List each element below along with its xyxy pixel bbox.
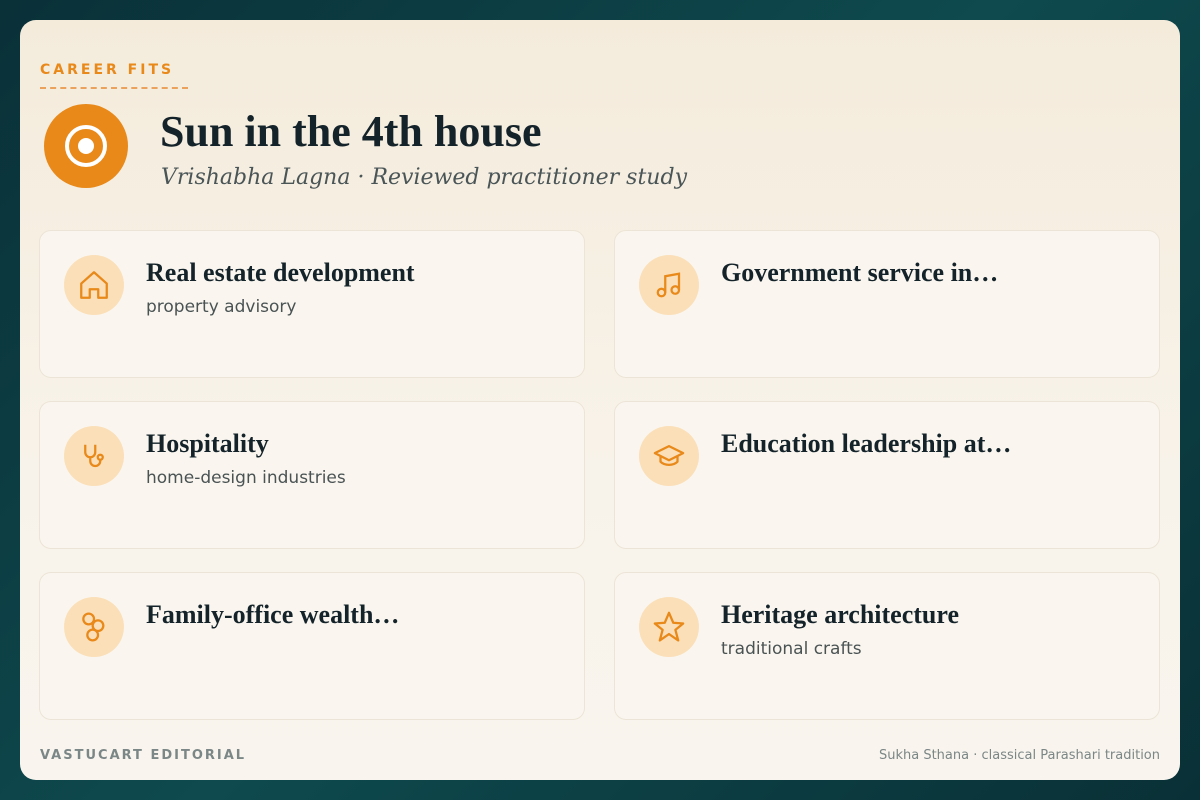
card: real estate: property advisory	[146, 297, 296, 317]
card: government	[614, 230, 1160, 378]
icon: graduation cap	[639, 426, 699, 486]
card: hospitality: home-design industries	[146, 468, 346, 488]
icon: music	[639, 255, 699, 315]
card: family office	[39, 572, 585, 720]
icon: stethoscope	[64, 426, 124, 486]
card: heritage: Heritage architecture	[721, 600, 959, 629]
card: hospitality	[39, 401, 585, 549]
icon: sun	[44, 104, 128, 188]
icon: house	[64, 255, 124, 315]
card: hospitality: Hospitality	[146, 429, 269, 458]
card: government: Government service in…	[721, 258, 998, 287]
card: heritage: traditional crafts	[721, 639, 862, 659]
subtitle: Vrishabha Lagna · Reviewed practitioner study	[161, 165, 687, 190]
icon: coins	[64, 597, 124, 657]
card: family office: Family-office wealth…	[146, 600, 399, 629]
eyebrow: career fits: CAREER FITS	[40, 62, 174, 78]
card: education: Education leadership at…	[721, 429, 1011, 458]
card: real estate: Real estate development	[146, 258, 415, 287]
footer right: Sukha Sthana · classical Parashari tradition	[879, 748, 1160, 763]
icon: star	[639, 597, 699, 657]
card: heritage	[614, 572, 1160, 720]
card: education	[614, 401, 1160, 549]
title: Sun in the 4th house	[160, 107, 541, 156]
card: real estate	[39, 230, 585, 378]
footer left: VASTUCART EDITORIAL	[40, 748, 246, 763]
